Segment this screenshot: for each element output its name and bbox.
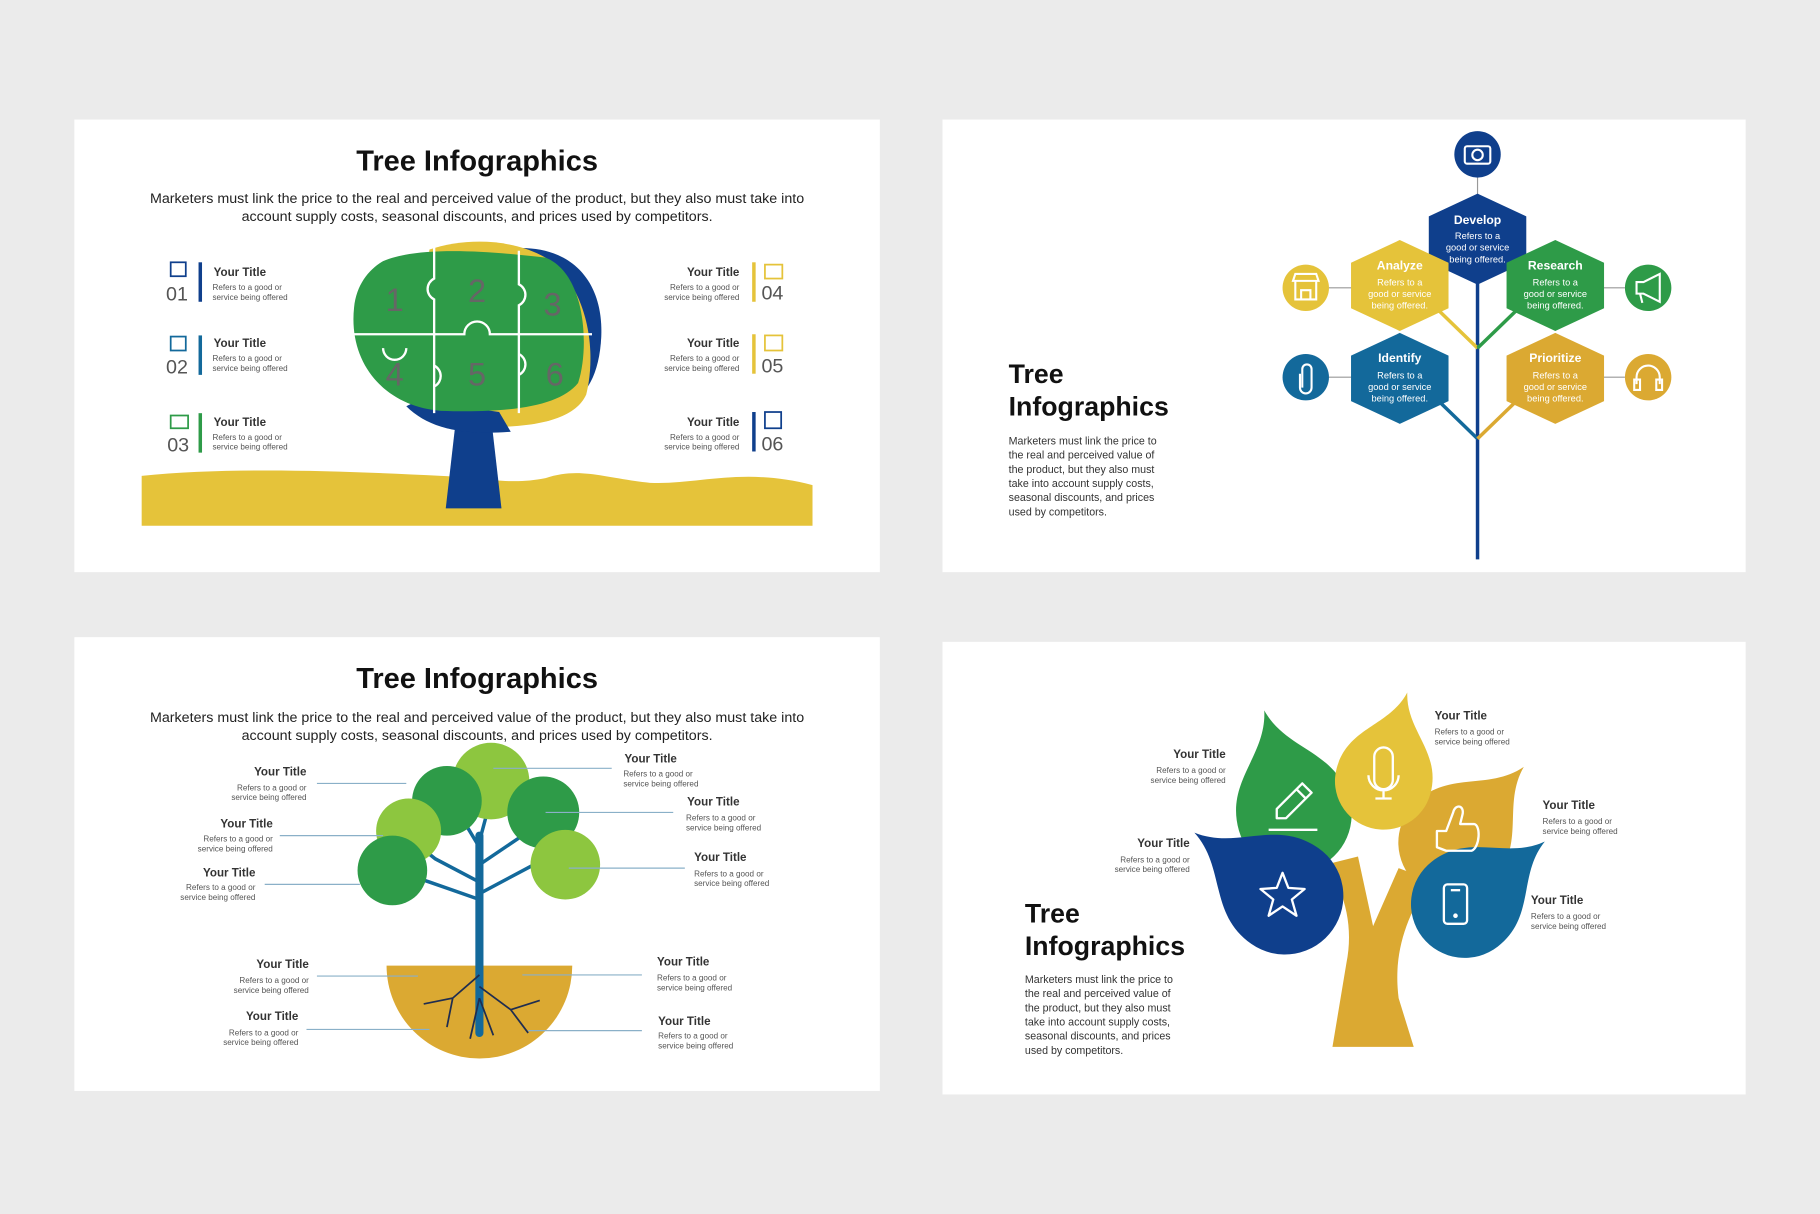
hex: develop: Develop bbox=[1454, 213, 1501, 227]
labels right: Your Title bbox=[658, 1015, 711, 1028]
labels bbox=[1115, 710, 1618, 931]
panel: hexagon tree bbox=[942, 120, 1746, 572]
labels right: Your Title bbox=[687, 795, 740, 808]
labels left bbox=[180, 765, 309, 1047]
labels left: Refers to a good or bbox=[239, 976, 309, 985]
roots bbox=[424, 975, 540, 1039]
labels right bbox=[623, 753, 769, 1051]
stem and branches bbox=[1329, 178, 1625, 559]
title: Tree bbox=[1009, 359, 1064, 389]
connector lines bbox=[265, 768, 685, 1031]
item 04: Refers to a good or bbox=[670, 283, 740, 292]
icon: store bbox=[1283, 265, 1329, 311]
item 06: 06 bbox=[761, 433, 783, 455]
panel: puzzle tree bbox=[74, 120, 880, 572]
hex: identify: Identify bbox=[1378, 351, 1422, 365]
labels left: Refers to a good or bbox=[229, 1028, 299, 1037]
item 05: Your Title bbox=[687, 337, 740, 350]
panel: leaf tree bbox=[942, 642, 1746, 1094]
text block: the real and perceived value of bbox=[1009, 450, 1154, 462]
item 01: Refers to a good or bbox=[212, 283, 282, 292]
icon: camera bbox=[1454, 131, 1501, 178]
labels: Refers to a good or bbox=[1531, 912, 1601, 921]
text block: seasonal discounts, and prices bbox=[1009, 492, 1154, 504]
hex: prioritize: Prioritize bbox=[1529, 351, 1582, 365]
labels: Refers to a good or bbox=[1543, 817, 1612, 826]
labels: Refers to a good or bbox=[1120, 855, 1190, 864]
item 05: service being offered bbox=[664, 364, 739, 373]
labels: Your Title bbox=[1435, 710, 1488, 723]
leaf: phone bbox=[1389, 799, 1578, 980]
item 03: Refers to a good or bbox=[212, 433, 282, 442]
hex: prioritize bbox=[1507, 333, 1604, 424]
labels left: service being offered bbox=[198, 844, 273, 853]
canopy: 1 bbox=[386, 282, 404, 318]
labels: Your Title bbox=[1173, 748, 1226, 761]
canopy circles bbox=[358, 743, 600, 905]
labels left: Your Title bbox=[203, 866, 256, 879]
title: Tree Infographics bbox=[356, 663, 598, 695]
labels left: Refers to a good or bbox=[186, 883, 256, 892]
text block: intro: account supply costs, seasonal discounts, and prices used by competitors. bbox=[242, 209, 713, 225]
labels: Your Title bbox=[1531, 894, 1584, 907]
text block: the product, but they also must bbox=[1025, 1002, 1171, 1014]
item 05: Refers to a good or bbox=[670, 354, 740, 363]
text block: take into account supply costs, bbox=[1009, 478, 1154, 490]
item 02: Refers to a good or bbox=[212, 354, 282, 363]
hex: identify: Refers to a bbox=[1377, 370, 1423, 380]
labels left: Refers to a good or bbox=[203, 834, 273, 843]
labels left: Your Title bbox=[246, 1010, 299, 1023]
item 02: 02 bbox=[166, 357, 188, 379]
item 06 bbox=[664, 412, 783, 455]
hex: analyze: Analyze bbox=[1377, 258, 1423, 272]
item 01 bbox=[166, 262, 288, 306]
canopy: 2 bbox=[468, 273, 486, 309]
hex: research bbox=[1507, 240, 1604, 331]
hex: develop: Refers to a bbox=[1455, 231, 1501, 241]
text block: seasonal discounts, and prices bbox=[1025, 1031, 1171, 1043]
labels right: service being offered bbox=[657, 984, 732, 993]
labels right: Refers to a good or bbox=[694, 869, 764, 878]
item 03: Your Title bbox=[214, 416, 267, 429]
labels right: Refers to a good or bbox=[686, 814, 756, 823]
labels right: service being offered bbox=[694, 879, 769, 888]
hex: analyze bbox=[1351, 240, 1449, 331]
labels left: service being offered bbox=[223, 1038, 298, 1047]
item 01: 01 bbox=[166, 284, 188, 306]
labels: service being offered bbox=[1531, 922, 1606, 931]
hex: prioritize: being offered. bbox=[1527, 394, 1584, 404]
item 03 bbox=[167, 413, 288, 456]
title: Tree bbox=[1025, 899, 1080, 929]
labels: service being offered bbox=[1435, 738, 1510, 747]
ground bbox=[142, 470, 813, 526]
text block: Marketers must link the price to bbox=[1009, 436, 1157, 448]
tree trunk bbox=[446, 427, 501, 508]
soil bowl bbox=[387, 966, 572, 1058]
canopy: 6 bbox=[546, 356, 564, 392]
item 05 bbox=[664, 334, 783, 378]
item 02: service being offered bbox=[212, 364, 288, 373]
item 04 bbox=[664, 262, 783, 304]
labels right: Your Title bbox=[657, 956, 710, 969]
text block: account supply costs, seasonal discounts, and prices used by competitors. bbox=[242, 728, 713, 744]
item 05: 05 bbox=[761, 356, 783, 378]
hex: identify bbox=[1351, 333, 1449, 424]
item 04: Your Title bbox=[687, 266, 740, 279]
leaf: thumbs up bbox=[1376, 729, 1564, 920]
labels right: Your Title bbox=[694, 851, 747, 864]
text block: intro: Marketers must link the price to the real and perceived value of the product, but they also must take into bbox=[150, 191, 804, 207]
item 02 bbox=[166, 335, 288, 379]
canopy bbox=[353, 242, 601, 433]
text block: the real and perceived value of bbox=[1025, 988, 1171, 1000]
icons bbox=[1261, 747, 1479, 924]
icon: paperclip bbox=[1283, 354, 1329, 400]
title: Tree Infographics bbox=[356, 146, 598, 178]
hex: research: being offered. bbox=[1527, 301, 1584, 311]
labels: service being offered bbox=[1151, 776, 1226, 785]
labels left: Your Title bbox=[220, 818, 273, 831]
text block: used by competitors. bbox=[1009, 506, 1107, 518]
labels: service being offered bbox=[1543, 827, 1618, 836]
item 06: Your Title bbox=[687, 416, 740, 429]
item 02: Your Title bbox=[214, 337, 267, 350]
text block: Marketers must link the price to bbox=[1025, 974, 1173, 986]
leaf: star bbox=[1161, 785, 1366, 977]
hex: develop bbox=[1429, 194, 1526, 285]
leaf: pencil bbox=[1209, 695, 1365, 886]
hex: prioritize: good or service bbox=[1524, 382, 1587, 392]
labels right: Refers to a good or bbox=[623, 769, 693, 778]
item 06: service being offered bbox=[664, 443, 739, 452]
hex: identify: good or service bbox=[1368, 382, 1431, 392]
canopy: 4 bbox=[386, 356, 404, 392]
hex: prioritize: Refers to a bbox=[1533, 370, 1579, 380]
item 04: 04 bbox=[761, 282, 783, 304]
hex: research: good or service bbox=[1524, 289, 1587, 299]
labels left: Refers to a good or bbox=[237, 783, 307, 792]
labels right: Refers to a good or bbox=[657, 974, 727, 983]
labels left: Your Title bbox=[254, 765, 307, 778]
title: Infographics bbox=[1009, 391, 1169, 421]
canopy: 5 bbox=[468, 356, 486, 392]
item 01: Your Title bbox=[214, 266, 267, 279]
text block: take into account supply costs, bbox=[1025, 1017, 1170, 1029]
labels: Your Title bbox=[1137, 837, 1190, 850]
hex: research: Research bbox=[1528, 258, 1583, 272]
hex: analyze: being offered. bbox=[1372, 301, 1428, 311]
icon: megaphone bbox=[1625, 265, 1671, 311]
item 01: service being offered bbox=[212, 293, 288, 302]
text block: the product, but they also must bbox=[1009, 464, 1154, 476]
labels right: Your Title bbox=[624, 753, 677, 766]
text block: Marketers must link the price to the real and perceived value of the product, but they also must take into bbox=[150, 710, 804, 726]
icon: headphones bbox=[1625, 354, 1671, 400]
hex: develop: being offered. bbox=[1449, 254, 1506, 264]
labels: Refers to a good or bbox=[1156, 766, 1226, 775]
labels: Your Title bbox=[1543, 799, 1595, 812]
panel: roots tree bbox=[74, 637, 880, 1091]
item 04: service being offered bbox=[664, 293, 739, 302]
hex: research: Refers to a bbox=[1533, 278, 1579, 288]
item 03: service being offered bbox=[212, 443, 288, 452]
hex: identify: being offered. bbox=[1372, 394, 1428, 404]
hex: analyze: Refers to a bbox=[1377, 278, 1423, 288]
title: Infographics bbox=[1025, 931, 1185, 961]
item 03: 03 bbox=[167, 434, 189, 456]
labels left: Your Title bbox=[256, 958, 309, 971]
labels left: service being offered bbox=[231, 793, 306, 802]
canopy: 3 bbox=[543, 287, 562, 323]
labels right: Refers to a good or bbox=[658, 1032, 728, 1041]
labels: Refers to a good or bbox=[1435, 728, 1504, 737]
trunk bbox=[1325, 857, 1430, 1047]
hex: develop: good or service bbox=[1446, 243, 1509, 253]
labels right: service being offered bbox=[658, 1042, 733, 1051]
leaf: microphone bbox=[1324, 680, 1454, 841]
item 06: Refers to a good or bbox=[670, 433, 740, 442]
text block: used by competitors. bbox=[1025, 1045, 1123, 1057]
tree trunk and branches bbox=[395, 789, 569, 1033]
labels: service being offered bbox=[1115, 865, 1190, 874]
labels left: service being offered bbox=[180, 893, 255, 902]
labels left: service being offered bbox=[234, 986, 309, 995]
hex: analyze: good or service bbox=[1368, 289, 1431, 299]
labels right: service being offered bbox=[623, 779, 698, 788]
labels right: service being offered bbox=[686, 823, 761, 832]
